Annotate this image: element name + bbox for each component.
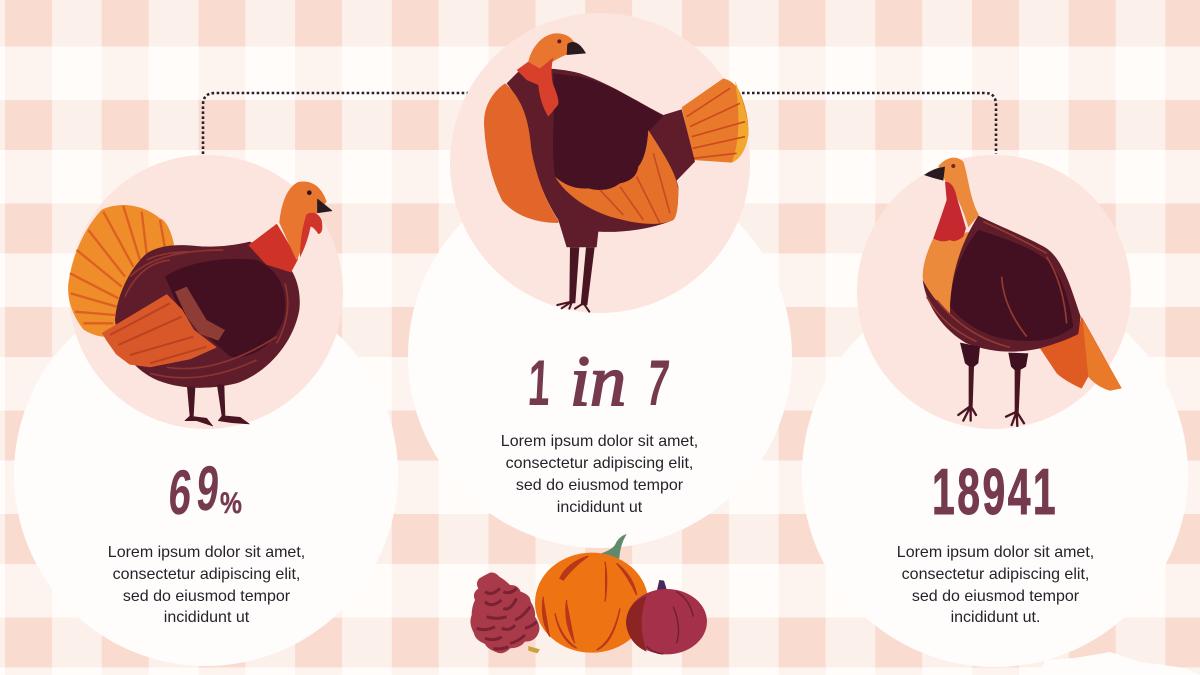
middle turkey backdrop circle — [450, 13, 750, 313]
icon: left turkey — [68, 181, 332, 426]
text block: right description: sed do eiusmod tempor — [912, 588, 1080, 605]
text block: right description — [897, 544, 1094, 626]
small red pumpkin — [626, 580, 707, 654]
pinecone — [470, 572, 540, 653]
left turkey backdrop circle — [69, 155, 343, 429]
stat: 1 in 7: 7 — [643, 348, 672, 420]
text block: middle description: sed do eiusmod tempor — [516, 477, 684, 494]
text block: right description: incididunt ut. — [951, 609, 1040, 626]
dotted connector right — [742, 93, 996, 154]
stat: 1 in 7: in — [570, 341, 626, 421]
icon: pumpkins and pinecone — [470, 534, 707, 654]
text block: middle description: Lorem ipsum dolor sit amet, — [501, 433, 698, 450]
stat: 69%: 6 — [166, 458, 195, 528]
text block: right description: Lorem ipsum dolor sit amet, — [897, 544, 1094, 561]
stat: 1 in 7: 1 — [526, 347, 552, 419]
text block: middle description: incididunt ut — [557, 499, 643, 516]
dotted connector left — [203, 93, 468, 154]
right turkey backdrop circle — [857, 155, 1131, 429]
stat: 69% — [166, 454, 242, 528]
icon: right turkey — [923, 158, 1122, 426]
stat: 69%: % — [220, 486, 242, 520]
text block: left description — [108, 544, 305, 626]
large orange pumpkin — [535, 534, 648, 653]
text block: left description: incididunt ut — [164, 609, 250, 626]
torn white paper edge — [1040, 652, 1200, 675]
text block: left description: Lorem ipsum dolor sit amet, — [108, 544, 305, 561]
stat: 69%: 9 — [194, 454, 222, 524]
panel: right stat circle — [802, 281, 1188, 667]
panel: left stat circle — [14, 282, 398, 666]
panel: middle stat circle — [408, 164, 792, 548]
text block: left description: consectetur adipiscing elit, — [113, 566, 300, 583]
text block: left description: sed do eiusmod tempor — [123, 588, 291, 605]
stat: 1 in 7 — [526, 341, 672, 421]
text block: middle description — [501, 433, 698, 516]
text block: right description: consectetur adipiscing elit, — [902, 566, 1089, 583]
stat: 18941: 18941 — [932, 457, 1058, 528]
text block: middle description: consectetur adipiscing elit, — [506, 455, 693, 472]
icon: middle turkey — [485, 33, 748, 312]
